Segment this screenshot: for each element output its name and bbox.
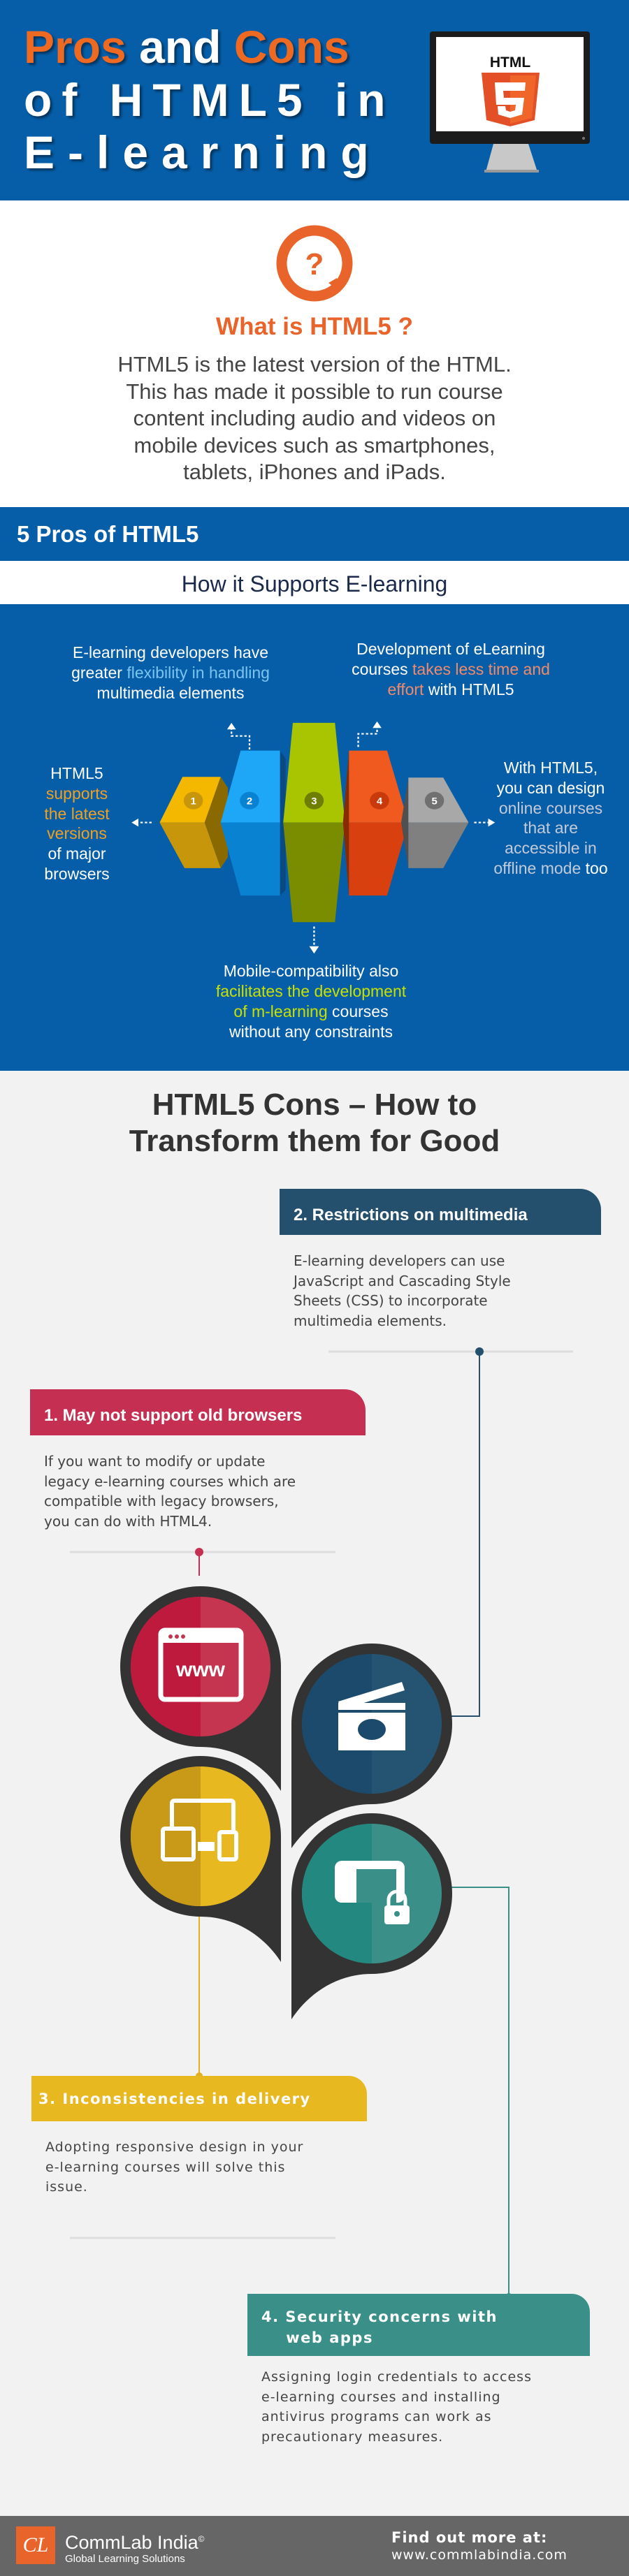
chart: 3D prism bars: 1 (191, 796, 196, 807)
card: 1. May not support old browsers: 1. May not support old browsers (44, 1406, 302, 1425)
subheading: How it Supports E-learning: How it Supports E-learning (182, 571, 447, 597)
chart: 3D prism bars: 3 (311, 796, 317, 807)
text: pro 1: browsers (44, 865, 110, 883)
card: 3. Inconsistencies in delivery (31, 2076, 367, 2195)
chart: 3D prism bars: 4 (377, 796, 382, 807)
card: 3. Inconsistencies in delivery: 3. Inconsistencies in delivery (38, 2091, 311, 2107)
text: pro 5: With HTML5, (504, 759, 598, 777)
title (24, 21, 396, 182)
text block: definition: This has made it possible to run course (126, 379, 503, 404)
text: pro 2: multimedia elements (97, 684, 244, 702)
chart: 3D prism bars: 2 (247, 796, 252, 807)
card: 4. Security concerns with web apps: web apps (286, 2329, 373, 2346)
card: 1. May not support old browsers (30, 1389, 366, 1530)
text: pro 3: of m-learning courses (233, 1002, 389, 1020)
text: pro 3: Mobile-compatibility also (224, 962, 398, 980)
card: 4. Security concerns with web apps: Assigning login credentials to access (261, 2369, 532, 2385)
heading bar: 5 Pros of HTML5 (0, 507, 629, 561)
text: pro 1: HTML5 (50, 764, 103, 782)
text: pro 5: online courses (499, 799, 602, 817)
heading: HTML5 Cons: Transform them for Good (129, 1124, 500, 1158)
chart: 3D prism bars (131, 721, 495, 954)
text: pro 3: without any constraints (229, 1023, 393, 1041)
text: pro 2: E-learning developers have (73, 643, 268, 661)
brand text: Global Learning Solutions (65, 2553, 185, 2565)
card: 4. Security concerns with web apps: 4. Security concerns with (261, 2308, 498, 2325)
text: pro 4 (352, 640, 550, 698)
text: find out more: www.commlabindia.com (391, 2547, 567, 2563)
icon: question bubble: ? (305, 247, 324, 281)
text block: definition: tablets, iPhones and iPads. (183, 460, 446, 484)
text: pro 1: of major (48, 844, 106, 863)
card: 1. May not support old browsers: If you want to modify or update (44, 1453, 265, 1470)
text: pro 5: that are (523, 819, 578, 837)
card: 1. May not support old browsers: legacy e-learning courses which are (44, 1473, 296, 1490)
chart: 3D prism bars: 5 (431, 796, 438, 807)
text: pro 4: courses takes less time and (352, 660, 550, 678)
text block: definition (117, 352, 512, 484)
text: pro 4: Development of eLearning (356, 640, 545, 658)
text block: definition: HTML5 is the latest version of the HTML. (117, 352, 512, 376)
text: pro 1: versions (47, 824, 107, 842)
icon: clapperboard (338, 1682, 405, 1750)
title: E-learning (24, 126, 382, 178)
card: 1. May not support old browsers: you can do with HTML4. (44, 1513, 212, 1530)
heading: HTML5 Cons (129, 1088, 500, 1158)
card: 2. Restrictions on multimedia: multimedia elements. (294, 1312, 447, 1329)
text: pro 2 (71, 643, 270, 702)
text: pro 5: accessible in (505, 839, 597, 857)
card: 3. Inconsistencies in delivery: Adopting responsive design in your (45, 2139, 303, 2155)
card: 3. Inconsistencies in delivery: e-learning courses will solve this (45, 2160, 285, 2175)
card: 2. Restrictions on multimedia (280, 1189, 601, 1329)
connector lines (70, 1347, 573, 2294)
heading: What is HTML5: What is HTML5 ? (216, 313, 413, 340)
text: find out more: Find out more at: (391, 2529, 547, 2546)
icon: www browser: www (175, 1658, 226, 1681)
card: 3. Inconsistencies in delivery: issue. (45, 2179, 88, 2195)
footer (0, 2516, 629, 2576)
icon: monitor with HTML5 logo (430, 31, 590, 173)
panel: what is HTML5 (0, 200, 629, 508)
card: 2. Restrictions on multimedia: 2. Restrictions on multimedia (294, 1206, 528, 1224)
brand text (65, 2532, 204, 2565)
card: 4. Security concerns with web apps: precautionary measures. (261, 2429, 443, 2445)
icon: www browser (161, 1630, 241, 1699)
heading bar: 5 Pros of HTML5: 5 Pros of HTML5 (17, 521, 198, 547)
text: pro 3: facilitates the development (216, 982, 406, 1000)
text: pro 2: greater flexibility in handling (71, 664, 270, 682)
text: pro 4: effort with HTML5 (387, 680, 514, 698)
text: pro 5: you can design (497, 779, 605, 797)
text: pro 5 (493, 759, 608, 877)
icon: question bubble (277, 225, 352, 302)
card: 2. Restrictions on multimedia: E-learning developers can use (294, 1252, 505, 1269)
subheading: How it Supports E-learning (0, 561, 629, 604)
card: 4. Security concerns with web apps (247, 2294, 590, 2445)
card: 2. Restrictions on multimedia: JavaScript and Cascading Style (294, 1273, 511, 1289)
header panel (0, 0, 629, 200)
text: pro 1: the latest (44, 805, 110, 823)
icon: monitor with HTML5 logo: HTML (490, 54, 530, 71)
panel: pros diagram (0, 604, 629, 1071)
text: find out more (391, 2529, 567, 2563)
text: pro 1: supports (46, 784, 108, 803)
text: pro 1 (44, 764, 110, 883)
icon: CommLab logo: CL (23, 2533, 48, 2556)
text block: definition: mobile devices such as smartphones, (134, 433, 495, 457)
title: Pros and Cons (24, 21, 349, 73)
icon: secure document (335, 1861, 410, 1924)
heading: HTML5 Cons: HTML5 Cons – How to (152, 1088, 477, 1122)
icon: devices (163, 1801, 236, 1859)
card: 1. May not support old browsers: compatible with legacy browsers, (44, 1493, 279, 1509)
title: of HTML5 in (24, 74, 396, 126)
text: pro 5: offline mode too (493, 859, 608, 877)
icons: four pin circles (120, 1586, 452, 2019)
card: 4. Security concerns with web apps: e-learning courses and installing (261, 2390, 501, 2405)
card: 4. Security concerns with web apps: antivirus programs can work as (261, 2409, 492, 2424)
text block: definition: content including audio and videos on (133, 406, 496, 430)
icon: CommLab logo (16, 2526, 55, 2564)
text: pro 3 (216, 962, 406, 1041)
card: 2. Restrictions on multimedia: Sheets (CSS) to incorporate (294, 1292, 488, 1309)
brand text: CommLab India© (65, 2532, 204, 2553)
